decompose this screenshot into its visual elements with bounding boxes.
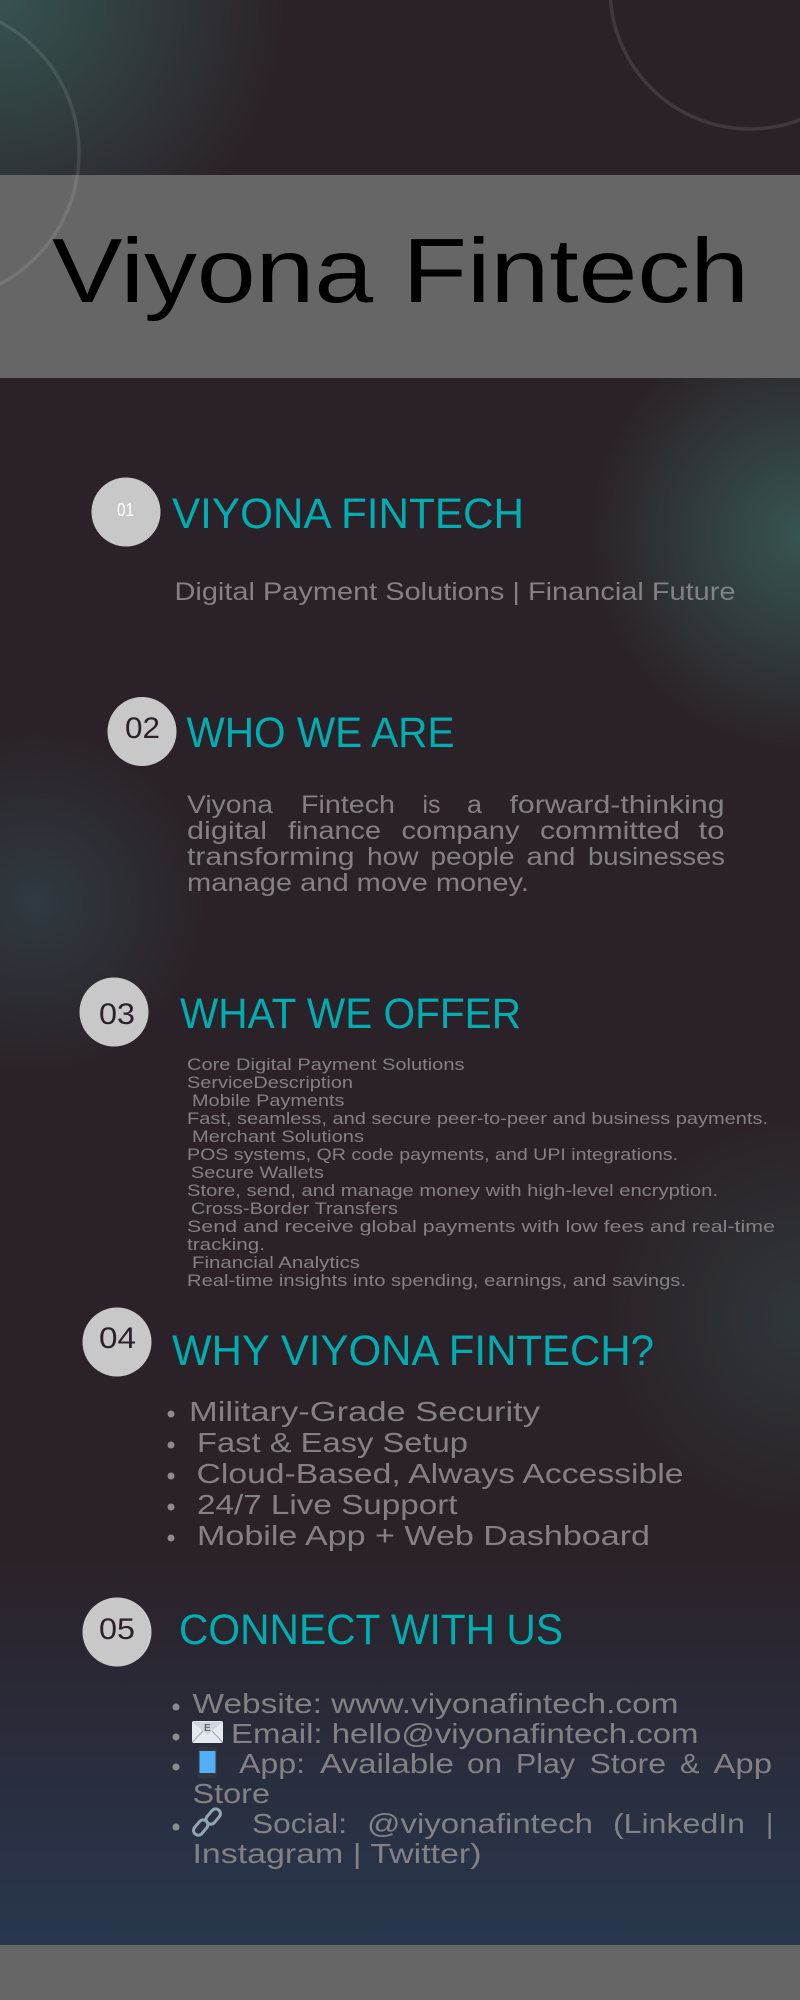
app line: Store <box>192 1778 270 1809</box>
paragraph: finance <box>288 817 381 845</box>
website line: Website: www.viyonafintech.com <box>192 1688 678 1719</box>
badge 02 <box>108 697 176 766</box>
decorative circle: top right <box>610 0 800 129</box>
app line: Store <box>590 1748 666 1779</box>
paragraph <box>187 791 725 897</box>
benefits list: Cloud-Based, Always Accessible <box>196 1458 684 1489</box>
services list: Send and receive global payments with low fees and real-time <box>187 1217 775 1236</box>
app line: & <box>680 1748 700 1779</box>
app line: App: <box>239 1748 305 1779</box>
section 01 <box>92 478 736 606</box>
services list: Cross-Border Transfers <box>191 1199 398 1218</box>
benefits list: Mobile App + Web Dashboard <box>197 1520 650 1551</box>
app line <box>192 1748 772 1809</box>
tagline: Digital Payment Solutions | Financial Future <box>174 578 736 606</box>
paragraph: transforming <box>187 843 354 871</box>
badge 04 <box>82 1308 152 1376</box>
paragraph: company <box>402 817 520 845</box>
section 02 <box>108 697 725 897</box>
benefits list: Military-Grade Security <box>189 1396 540 1427</box>
social line <box>192 1808 773 1869</box>
paragraph: a <box>467 791 482 819</box>
paragraph: digital <box>187 817 267 845</box>
services list: Mobile Payments <box>192 1091 344 1110</box>
social line: Social: <box>252 1808 347 1839</box>
services list: Merchant Solutions <box>192 1127 364 1146</box>
heading: viyona fintech: VIYONA FINTECH <box>172 490 524 538</box>
icon: link <box>192 1807 222 1837</box>
badge 02: 02 <box>125 712 160 745</box>
icon: envelope <box>192 1721 223 1743</box>
services list: Financial Analytics <box>192 1253 360 1272</box>
services list: ServiceDescription <box>187 1073 353 1092</box>
icon: envelope: E <box>204 1723 211 1734</box>
app line: App <box>714 1748 772 1779</box>
social line: Instagram | Twitter) <box>192 1838 482 1869</box>
badge 03: 03 <box>99 998 135 1031</box>
heading: why viyona fintech: WHY VIYONA FINTECH? <box>172 1327 654 1375</box>
app line: Play <box>516 1748 575 1779</box>
services list: Secure Wallets <box>191 1163 324 1182</box>
services list: Core Digital Payment Solutions <box>187 1055 464 1074</box>
paragraph: Fintech <box>301 791 395 819</box>
app line: Available <box>320 1748 454 1779</box>
decorative circle: top left <box>0 5 79 301</box>
paragraph: people <box>430 843 514 871</box>
paragraph: manage and move money. <box>187 869 529 897</box>
paragraph: is <box>422 791 440 819</box>
email line: Email: hello@viyonafintech.com <box>231 1718 698 1749</box>
badge 05: 05 <box>99 1613 135 1646</box>
badge 01: 01 <box>117 500 134 520</box>
badge 04: 04 <box>99 1322 136 1355</box>
title: Viyona Fintech <box>52 221 749 322</box>
paragraph: Viyona <box>187 791 273 819</box>
heading: who we are: WHO WE ARE <box>186 709 454 757</box>
section 05 <box>82 1598 773 1869</box>
badge 05 <box>82 1598 152 1666</box>
services list: Real-time insights into spending, earnings, and savings. <box>187 1271 686 1290</box>
title band <box>0 175 800 378</box>
paragraph: committed <box>540 817 680 845</box>
benefits list: Fast & Easy Setup <box>197 1427 468 1458</box>
social line: | <box>766 1808 773 1839</box>
paragraph: forward-thinking <box>510 791 724 819</box>
icon: phone <box>198 1747 217 1778</box>
services list: Fast, seamless, and secure peer-to-peer and business payments. <box>187 1109 768 1128</box>
social line: @viyonafintech <box>367 1808 593 1839</box>
paragraph: and <box>526 843 576 871</box>
services list: POS systems, QR code payments, and UPI integrations. <box>187 1145 678 1164</box>
services list: Store, send, and manage money with high-level encryption. <box>187 1181 718 1200</box>
social line: (LinkedIn <box>613 1808 745 1839</box>
badge 01 <box>92 478 160 546</box>
footer band <box>0 1945 800 2000</box>
heading: connect with us: CONNECT WITH US <box>179 1606 563 1654</box>
app line: on <box>467 1748 502 1779</box>
section 04 <box>82 1308 684 1551</box>
benefits list <box>168 1396 684 1551</box>
heading: what we offer: WHAT WE OFFER <box>180 990 521 1038</box>
badge 03 <box>80 978 148 1046</box>
services list <box>187 1055 775 1290</box>
benefits list: 24/7 Live Support <box>197 1489 458 1520</box>
services list: tracking. <box>187 1235 265 1254</box>
paragraph: how <box>367 843 420 871</box>
contact list <box>172 1688 773 1869</box>
paragraph: to <box>698 817 724 845</box>
paragraph: businesses <box>588 843 725 871</box>
section 03 <box>80 978 775 1290</box>
